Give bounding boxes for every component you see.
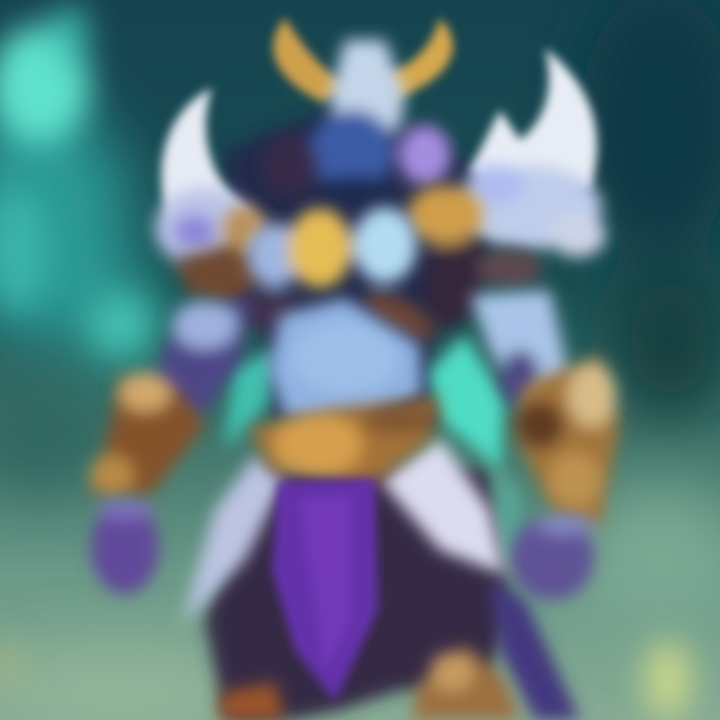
left horn: white curved spike — [161, 88, 250, 222]
chest plate: gold and ice-blue gem — [236, 207, 443, 349]
helmet golden horns — [273, 18, 453, 102]
right bracer: gold and brown — [512, 355, 620, 525]
right horn: white curved spike — [470, 48, 597, 200]
trailing purple sash — [490, 580, 580, 720]
glow: turquoise behind torso — [225, 335, 525, 560]
left fist: purple gauntlet — [91, 500, 159, 594]
right arm: lavender and purple — [470, 290, 570, 410]
left arm: lavender and purple — [150, 300, 250, 420]
white tabard panels — [182, 438, 505, 625]
purple loincloth — [272, 478, 378, 702]
shoulder gold and brown straps — [175, 185, 542, 330]
belt: golden buckle — [250, 398, 440, 485]
shoulder pauldrons: lavender armor — [155, 165, 606, 268]
glow: bright teal energy upper left — [0, 5, 150, 355]
dark body silhouette — [205, 110, 510, 720]
torso: pale blue abdomen — [268, 298, 422, 418]
right fist: purple gauntlet — [510, 515, 594, 600]
glow: yellow-green haze lower right — [0, 640, 692, 720]
helmet crown — [262, 40, 451, 204]
left bracer: gold and brown — [90, 372, 205, 495]
legs: bronze boots — [218, 645, 520, 720]
